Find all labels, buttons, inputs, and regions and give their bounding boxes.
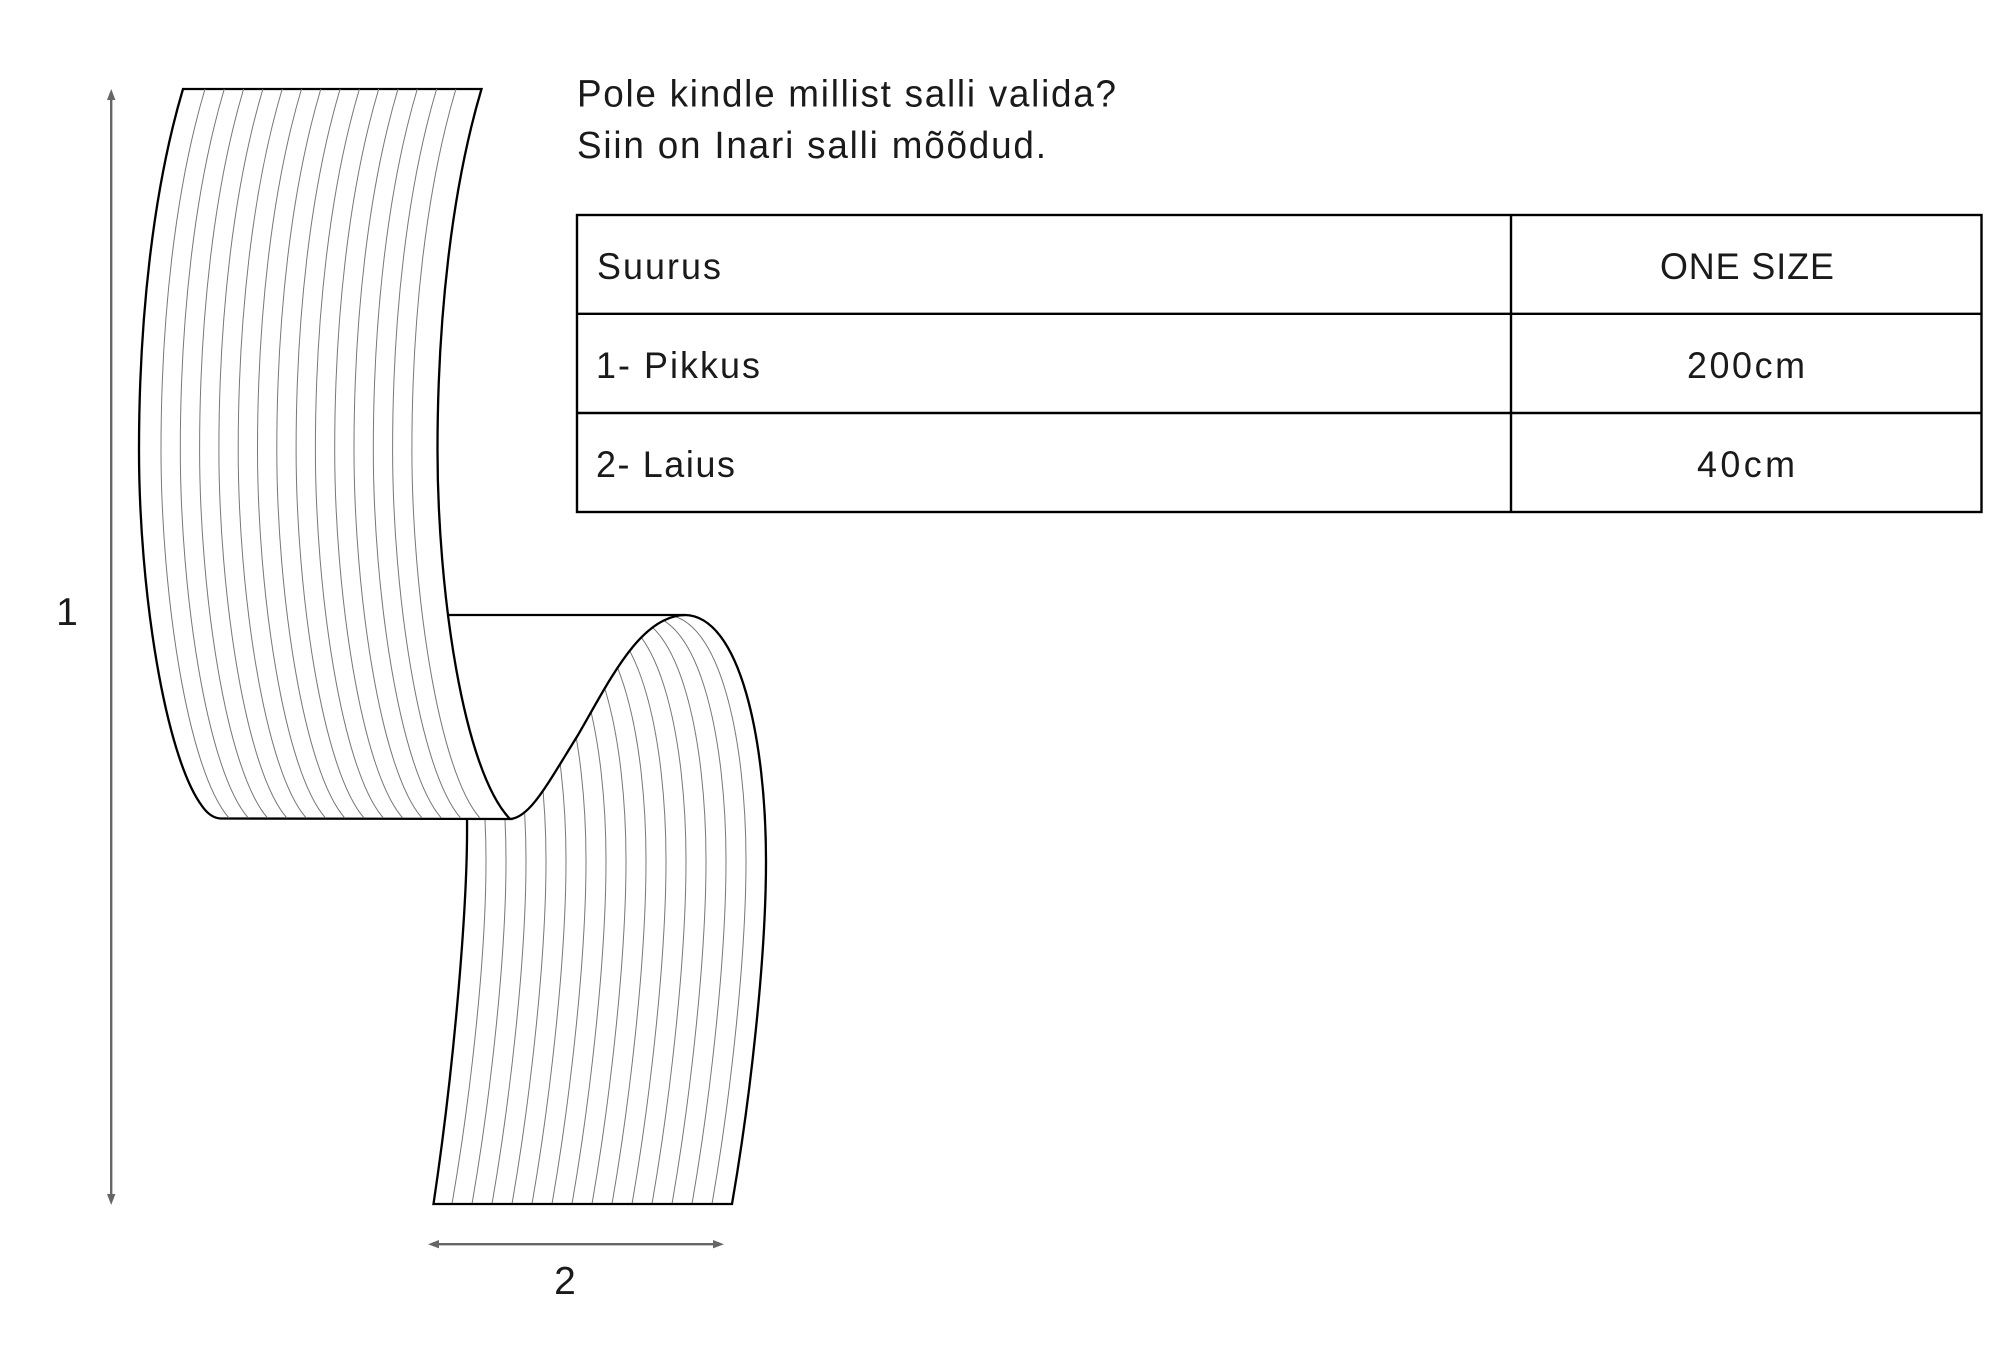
heading text xyxy=(577,72,1116,166)
arrow: length dimension xyxy=(107,89,115,1205)
table row: length xyxy=(596,345,1805,386)
label: dimension 1: 1 xyxy=(56,591,78,634)
heading text: Pole kindle millist salli valida? xyxy=(577,72,1116,115)
table row: width: 2- Laius xyxy=(596,444,735,485)
table row: width: 40cm xyxy=(1697,444,1795,485)
table row: size: Suurus xyxy=(597,246,721,287)
table row: size xyxy=(597,246,1834,287)
arrow: width dimension xyxy=(428,1240,724,1248)
size table xyxy=(577,215,1982,512)
scarf upper band xyxy=(139,89,510,819)
table row: size: ONE SIZE xyxy=(1660,246,1834,287)
label: dimension 2: 2 xyxy=(554,1260,576,1303)
table row: length: 200cm xyxy=(1687,345,1805,386)
table row: width xyxy=(596,444,1795,485)
scarf illustration xyxy=(139,89,766,1204)
table row: length: 1- Pikkus xyxy=(596,345,760,386)
scarf lower band xyxy=(405,615,766,1204)
heading text: Siin on Inari salli mõõdud. xyxy=(577,123,1046,166)
